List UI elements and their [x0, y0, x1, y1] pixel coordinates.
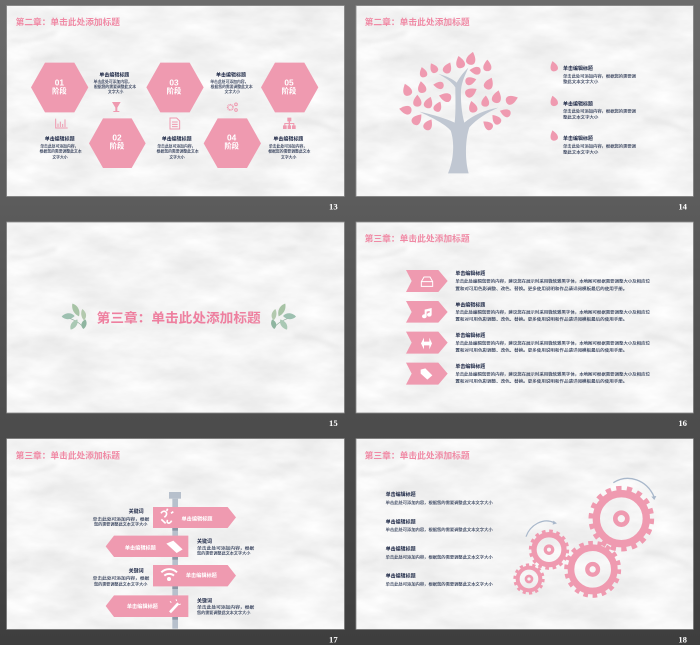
hexagon 04 — [204, 118, 261, 168]
bullet item 3: 单击此处可添加内容，根据您的需要调 — [563, 144, 636, 149]
list item 1 — [386, 491, 493, 505]
bullet item 2: 整此文本文字大小 — [563, 114, 599, 119]
page number: 18 — [678, 635, 688, 645]
row 2: 置和对可用色彩调整、改色、替换。更多使用说明和作品请详阅模板最后的使用手册。 — [455, 317, 627, 322]
hexagon 01 — [31, 63, 88, 112]
row 1: 单击编辑标题 — [455, 270, 485, 277]
sign 4 — [106, 595, 188, 617]
hexagon 02: 02 — [112, 133, 122, 143]
icon: wifi — [161, 569, 177, 581]
bullet item 1: 单击编辑标题 — [563, 65, 593, 72]
page number: 13 — [329, 201, 338, 211]
left leaf sprig — [62, 304, 87, 330]
page number: 15 — [329, 418, 338, 428]
hexagon 04: 阶段 — [224, 141, 240, 150]
caption 2: 单击此处可添加内容，根据 — [197, 545, 255, 550]
text block 4: 文字大小 — [169, 154, 185, 159]
small gear — [530, 531, 568, 568]
row 2: 单击此处编辑您要的内容，建议您在展示时采用微软雅黑字体，本地图可根据需要调整大小及相应位 — [455, 310, 650, 315]
text block 1: 单击编辑标题 — [99, 71, 129, 78]
text block 3 — [40, 136, 82, 159]
bullet item 3: 整此文本文字大小 — [563, 149, 599, 154]
caption 4: 单击此处可添加内容，根据 — [197, 605, 255, 610]
page number: 17 — [329, 635, 338, 645]
list item 4: 单击此处可添加内容，根据您的需要调整此文本文字大小 — [386, 581, 493, 586]
list item 2: 单击编辑标题 — [386, 518, 416, 525]
text block 3: 根据您的需要调整此文本 — [40, 149, 82, 154]
bullet item 3 — [549, 129, 636, 154]
hexagon 01: 阶段 — [52, 86, 67, 95]
text block 4: 单击此处可添加内容， — [157, 143, 195, 148]
text block 1: 根据您的需要调整此文本 — [94, 84, 136, 89]
text block 2: 单击编辑标题 — [216, 71, 246, 78]
right leaf sprig — [271, 304, 296, 330]
tree leaves — [398, 51, 519, 132]
row 1: 单击此处编辑您要的内容，建议您在展示时采用微软雅黑字体，本地图可根据需要调整大小及相应位 — [455, 278, 650, 283]
icon: music note — [422, 308, 432, 318]
panel: slide 18 gears — [356, 438, 694, 645]
arrow: large arc — [613, 478, 656, 500]
row 2: 单击编辑标题 — [455, 301, 485, 308]
row 4: 单击编辑标题 — [455, 363, 485, 370]
caption 4: 您的需要调整此文本文字大小 — [197, 610, 251, 615]
text block 3: 文字大小 — [52, 154, 68, 159]
caption 3: 关键词 — [129, 567, 144, 574]
text block 3: 单击此处可添加内容， — [40, 143, 78, 148]
text block 2: 单击此处可添加内容， — [210, 79, 248, 84]
panel: slide 17 signpost — [6, 438, 345, 645]
caption 2: 您的需要调整此文本文字大小 — [197, 550, 251, 555]
row 4 — [406, 363, 650, 385]
text block 4 — [157, 136, 199, 159]
panel: slide 13 stages — [6, 5, 345, 211]
caption 2: 关键词 — [197, 538, 212, 545]
panel: slide 14 tree — [356, 5, 694, 211]
caption 1: 单击此处可添加内容，根据 — [93, 516, 150, 521]
list item 1: 单击编辑标题 — [386, 491, 416, 498]
panel: slide 15 chapter title — [6, 222, 345, 428]
icon: magic wand — [170, 599, 181, 612]
list item 3: 单击此处可添加内容，根据您的需要调整此文本文字大小 — [386, 554, 493, 559]
medium gear — [566, 543, 619, 596]
row 4: 置和对可用色彩调整、改色、替换。更多使用说明和作品请详阅模板最后的使用手册。 — [455, 379, 627, 384]
icon: tag — [421, 368, 432, 380]
sign 1 — [153, 507, 236, 528]
text block 1: 文字大小 — [108, 89, 123, 94]
row 4: 单击此处编辑您要的内容，建议您在展示时采用微软雅黑字体，本地图可根据需要调整大小及相应位 — [455, 371, 650, 376]
text block 5: 根据您的需要调整此文本 — [268, 149, 311, 154]
hexagon 03: 03 — [169, 78, 179, 88]
text block 4: 根据您的需要调整此文本 — [157, 149, 199, 154]
sign 4: 单击编辑标题 — [127, 602, 159, 610]
bullet item 2: 单击此处可添加内容，根据您的需要调 — [563, 109, 636, 114]
hexagon 02: 阶段 — [110, 141, 125, 150]
hexagon 03: 阶段 — [167, 86, 182, 95]
title: 第三章：单击此处添加标题 — [365, 449, 470, 460]
hexagon 03 — [146, 63, 204, 112]
title: 第三章：单击此处添加标题 — [16, 449, 120, 460]
icon: goblet — [112, 102, 121, 112]
title: 第二章：单击此处添加标题 — [16, 16, 120, 27]
sign 1: 单击编辑标题 — [182, 514, 213, 522]
icon: double arrow — [421, 338, 432, 349]
hexagon 04: 04 — [227, 133, 237, 143]
caption 1: 您的需要调整此文本文字大小 — [94, 522, 148, 527]
row 3: 置和对可用色彩调整、改色、替换。更多使用说明和作品请详阅模板最后的使用手册。 — [455, 348, 627, 353]
icon: document — [170, 118, 180, 129]
icon: tag — [166, 541, 183, 553]
text block 5: 单击此处可添加内容， — [269, 143, 307, 148]
text block 2 — [210, 71, 253, 94]
list item 3: 单击编辑标题 — [386, 546, 416, 553]
smallest gear — [515, 565, 543, 593]
caption 4 — [197, 597, 255, 615]
bullet item 1 — [549, 60, 636, 84]
list item 2: 单击此处可添加内容，根据您的需要调整此文本文字大小 — [386, 527, 493, 532]
chapter title: 第三章：单击此处添加标题 — [97, 309, 261, 325]
sign 3 — [153, 565, 236, 586]
large gear — [591, 488, 652, 549]
list item 3 — [386, 546, 493, 559]
title: 第三章：单击此处添加标题 — [365, 233, 470, 244]
caption 1 — [93, 508, 150, 527]
caption 3: 单击此处可添加内容，根据 — [93, 576, 150, 581]
caption 1: 关键词 — [129, 508, 144, 515]
icon: bar chart — [56, 119, 68, 128]
sign 2 — [106, 536, 188, 557]
row 2 — [406, 301, 650, 323]
text block 2: 根据您的需要调整此文本 — [211, 84, 253, 89]
list item 1: 单击此处可添加内容，根据您的需要调整此文本文字大小 — [386, 500, 493, 505]
row 3: 单击编辑标题 — [455, 332, 485, 339]
tree trunk — [419, 68, 498, 173]
hexagon 01: 01 — [55, 78, 64, 88]
panel: slide 16 list — [356, 222, 694, 428]
icon: broken link — [161, 509, 173, 523]
row 3: 单击此处编辑您要的内容，建议您在展示时采用微软雅黑字体，本地图可根据需要调整大小及相应位 — [455, 341, 650, 346]
caption 3: 您的需要调整此文本文字大小 — [94, 581, 148, 586]
text block 2: 文字大小 — [225, 89, 240, 94]
title: 第二章：单击此处添加标题 — [365, 16, 470, 27]
text block 4: 单击编辑标题 — [162, 136, 192, 143]
icon: org chart — [283, 118, 296, 129]
bullet item 2: 单击编辑标题 — [563, 100, 593, 107]
icon: gears — [228, 103, 237, 111]
page number: 16 — [678, 418, 688, 428]
bullet item 3: 单击编辑标题 — [563, 135, 593, 142]
arrow: small arc — [526, 521, 557, 537]
caption 4: 关键词 — [197, 597, 212, 604]
text block 1: 单击此处可添加内容， — [94, 79, 132, 84]
signpost pole — [169, 492, 181, 629]
list item 2 — [386, 518, 493, 532]
icon: drive — [421, 277, 433, 286]
sign 3: 单击编辑标题 — [186, 571, 218, 579]
text block 5: 单击编辑标题 — [273, 136, 303, 143]
caption 2 — [197, 538, 255, 555]
row 3 — [406, 332, 650, 354]
text block 5: 文字大小 — [281, 154, 296, 159]
list item 4: 单击编辑标题 — [386, 573, 416, 580]
caption 3 — [93, 567, 150, 586]
bullet item 2 — [549, 95, 636, 119]
row 1: 置和对可用色彩调整、改色、替换。更多使用说明和作品请详阅模板最后的使用手册。 — [455, 286, 627, 291]
text block 5 — [268, 136, 311, 159]
hexagon 05: 05 — [284, 78, 294, 88]
bullet item 1: 整此文本文字大小 — [563, 79, 599, 84]
text block 1 — [94, 71, 136, 94]
hexagon 02 — [89, 118, 146, 168]
hexagon 05: 阶段 — [282, 86, 297, 95]
list item 4 — [386, 573, 493, 586]
page number: 14 — [678, 201, 688, 211]
hexagon 05 — [261, 63, 318, 112]
sign 2: 单击编辑标题 — [125, 543, 157, 551]
bullet item 1: 单击此处可添加内容，根据您的需要调 — [563, 74, 636, 79]
text block 3: 单击编辑标题 — [45, 136, 75, 143]
row 1 — [406, 270, 650, 292]
